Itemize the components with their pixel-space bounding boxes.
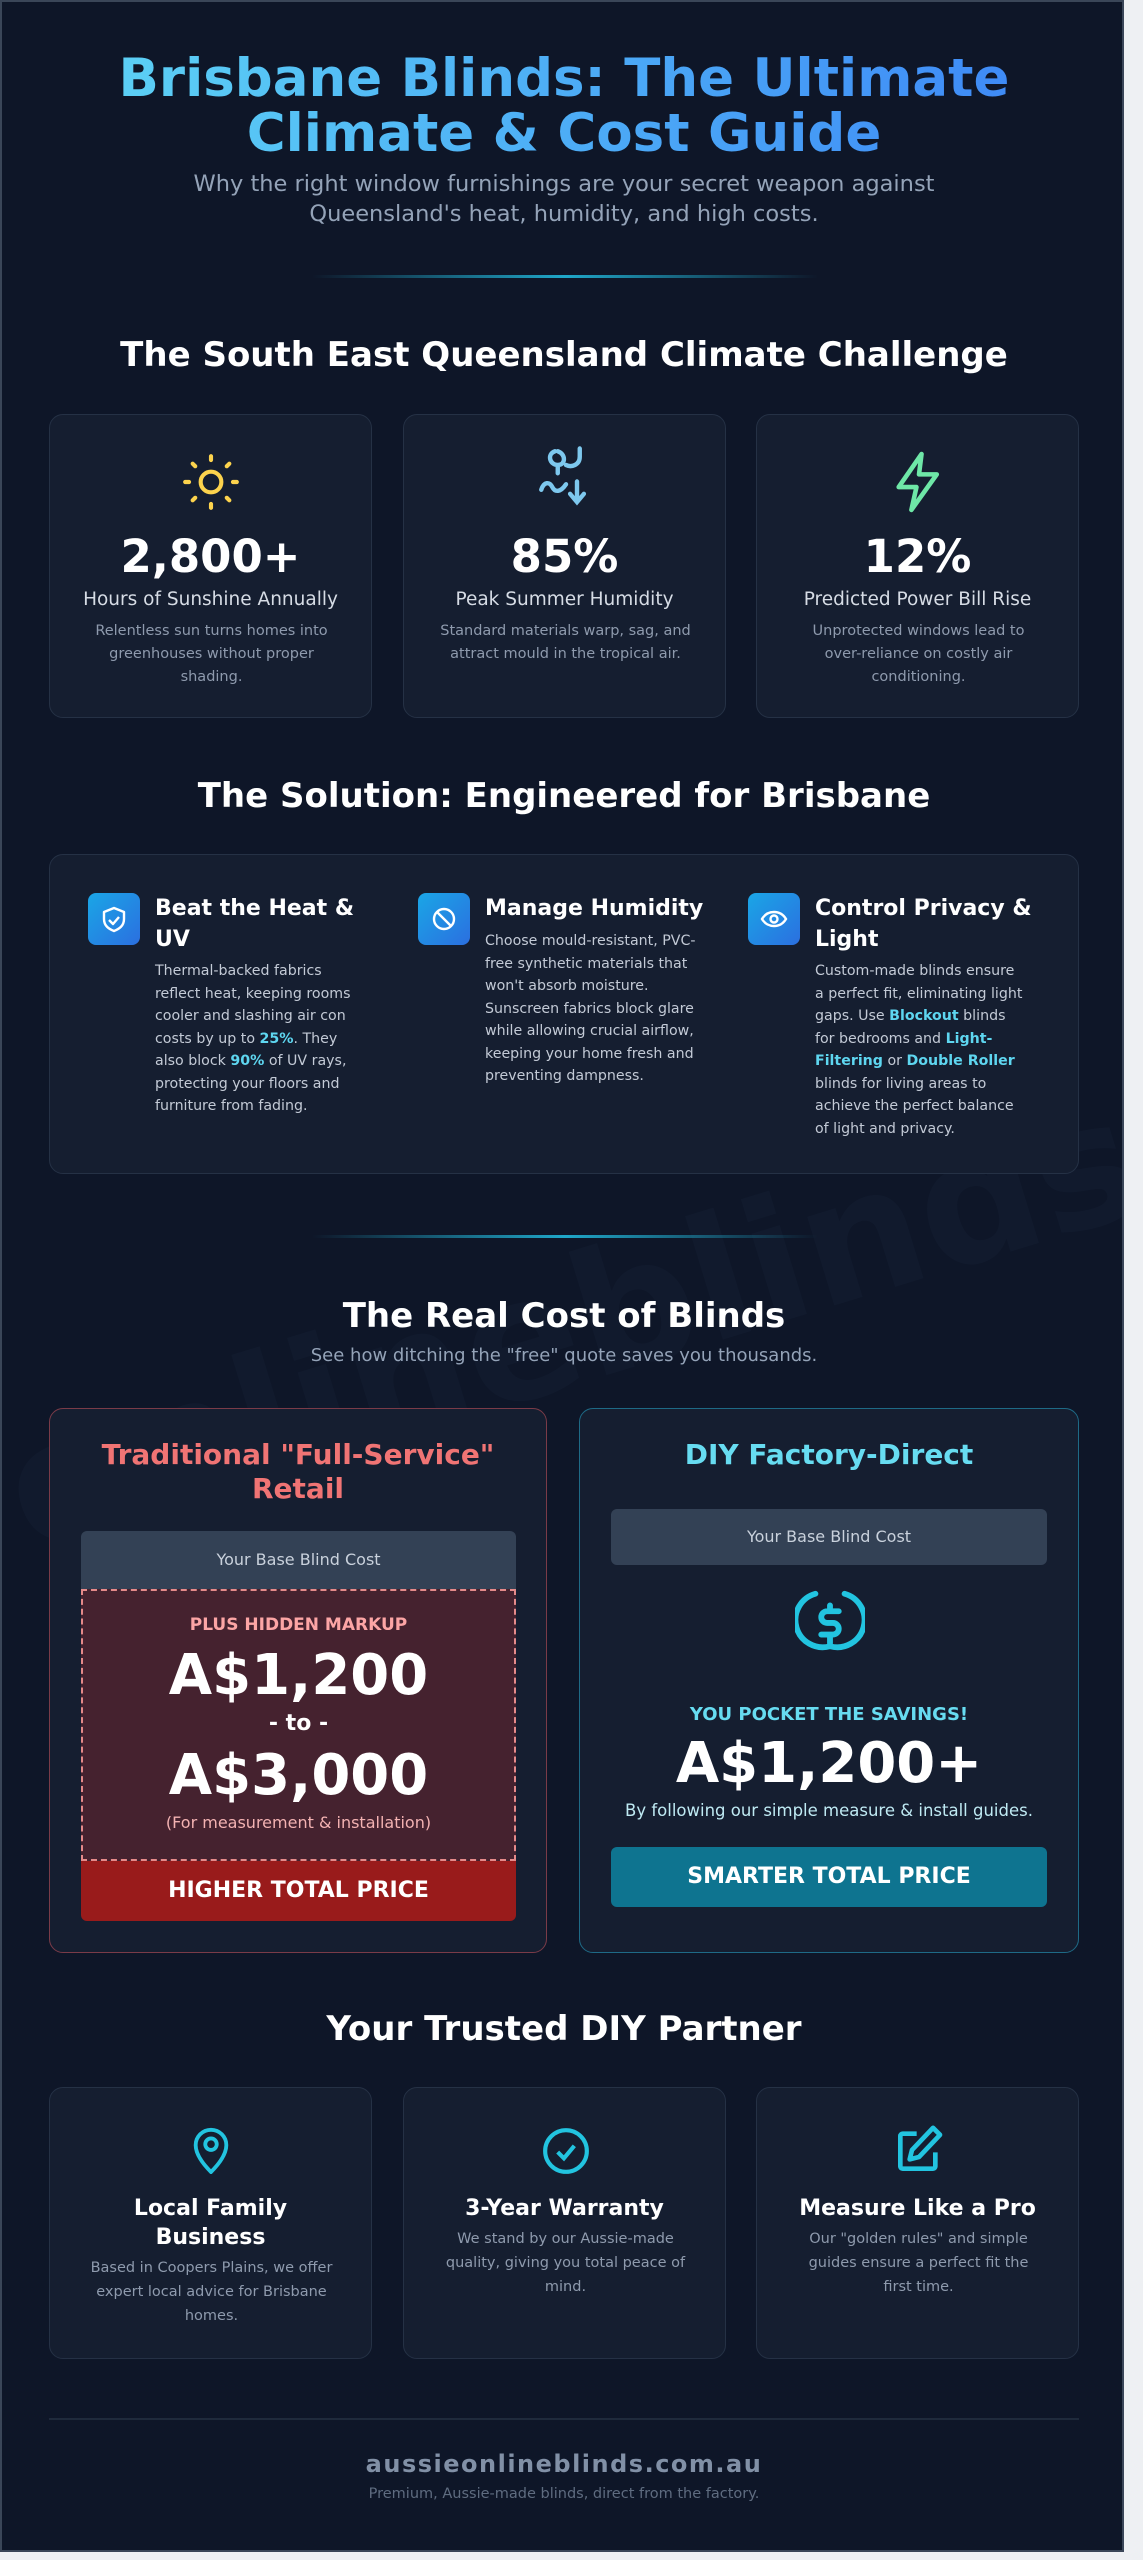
title: Brisbane Blinds: The Ultimate: [119, 48, 1009, 109]
heading: climate challenge: The South East Queensland Climate Challenge: [120, 335, 1008, 375]
panel: DIY factory direct: [579, 1408, 1079, 1953]
subtitle: Why the right window furnishings are your secret weapon against: [194, 171, 934, 197]
panel: power bill: 12%: [864, 530, 971, 583]
heading: real cost: The Real Cost of Blinds: [343, 1296, 785, 1336]
title: [2, 51, 1126, 161]
base cost block: [611, 1509, 1047, 1565]
panel: sunshine: 2,800+: [120, 530, 301, 583]
panel: humidity: Peak Summer Humidity: [455, 589, 674, 610]
base cost block: Your Base Blind Cost: [747, 1527, 911, 1546]
panel: solution: [49, 854, 1079, 1174]
panel: DIY factory direct: YOU POCKET THE SAVINGS!: [690, 1704, 968, 1725]
panel: DIY factory direct: DIY Factory-Direct: [685, 1438, 973, 1471]
panel: sunshine: [49, 414, 372, 718]
base cost block: Your Base Blind Cost: [216, 1550, 381, 1569]
panel: power bill: [756, 414, 1079, 718]
icon: eye: [748, 893, 800, 945]
icon: shield: [88, 893, 140, 945]
item: humidity: [418, 893, 703, 1084]
hidden markup block: [81, 1589, 516, 1861]
panel: local business: Business: [156, 2225, 265, 2250]
smarter total button: [611, 1847, 1047, 1907]
heading: trusted partner: Your Trusted DIY Partner: [326, 2009, 802, 2049]
base cost block: [81, 1531, 516, 1589]
panel: power bill: Predicted Power Bill Rise: [804, 589, 1031, 610]
panel: sunshine: Relentless sun turns homes into greenhouses without proper shading.: [95, 623, 328, 685]
panel: measure: Measure Like a Pro: [799, 2196, 1036, 2221]
panel: humidity: [403, 414, 726, 718]
higher total bar: HIGHER TOTAL PRICE: [168, 1878, 429, 1903]
panel: measure: Our "golden rules" and simple guides ensure a perfect fit the first time.: [809, 2231, 1028, 2295]
panel: humidity: 85%: [511, 530, 618, 583]
icon: lightning: [896, 452, 940, 512]
panel: warranty: 3-Year Warranty: [465, 2196, 664, 2221]
item: heat & UV: [88, 893, 354, 1114]
panel: measure: [756, 2087, 1079, 2359]
icon: pencil edit: [898, 2126, 942, 2171]
icon: sun: [183, 454, 239, 510]
heading: solution: The Solution: Engineered for Brisbane: [198, 776, 930, 816]
icon: savings: [795, 1590, 865, 1650]
panel: warranty: [403, 2087, 726, 2359]
footer domain: aussieonlineblinds.com.au: [366, 2450, 762, 2478]
item: privacy: [748, 893, 1032, 1136]
item: privacy: Control Privacy & Light: [815, 896, 1032, 952]
subtitle: [194, 171, 934, 227]
panel: humidity: Standard materials warp, sag, and attract mould in the tropical air.: [440, 623, 691, 662]
panel: power bill: Unprotected windows lead to over-reliance on costly air conditioning.: [813, 623, 1024, 685]
subtitle: Queensland's heat, humidity, and high costs.: [309, 201, 819, 227]
icon: check circle: [543, 2128, 589, 2174]
icon: humidity: [539, 446, 586, 506]
item: privacy: Custom-made blinds ensure a perfect fit, eliminating light gaps. Use Blockout blinds for bedrooms and Light-Filtering or Double Roller blinds for living areas to achieve the perfect balance of light and privacy.: [815, 963, 1022, 1136]
title: Climate & Cost Guide: [247, 103, 881, 164]
panel: warranty: We stand by our Aussie-made quality, giving you total peace of mind.: [446, 2231, 685, 2295]
hidden markup block: - to -: [269, 1711, 328, 1736]
hidden markup block: A$3,000: [169, 1743, 428, 1808]
hidden markup block: A$1,200: [169, 1643, 428, 1708]
item: heat & UV: Beat the Heat & UV: [155, 896, 354, 952]
hidden markup block: (For measurement & installation): [166, 1813, 431, 1832]
panel: DIY factory direct: By following our simple measure & install guides.: [625, 1801, 1033, 1820]
footer tagline: Premium, Aussie-made blinds, direct from the factory.: [369, 2486, 759, 2502]
panel: traditional retail: Traditional "Full-Service": [102, 1438, 494, 1471]
icon: no-sign: [418, 893, 470, 945]
panel: traditional retail: Retail: [252, 1472, 344, 1505]
hidden markup block: PLUS HIDDEN MARKUP: [190, 1615, 407, 1635]
item: humidity: Choose mould-resistant, PVC-free synthetic materials that won't absorb moisture. Sunscreen fabrics block glare while allowing crucial airflow, keeping your home fresh and preventing dampness.: [485, 933, 696, 1084]
panel: DIY factory direct: A$1,200+: [676, 1731, 982, 1796]
panel: local business: [49, 2087, 372, 2359]
panel: local business: Local Family: [134, 2196, 287, 2221]
panel: traditional retail: [49, 1408, 547, 1953]
smarter total button: SMARTER TOTAL PRICE: [687, 1864, 971, 1889]
subheading: See how ditching the "free" quote saves you thousands.: [311, 1345, 817, 1366]
higher total bar: [81, 1861, 516, 1921]
item: heat & UV: Thermal-backed fabrics reflect heat, keeping rooms cooler and slashing air con costs by up to 25%. They also block 90% of UV rays, protecting your floors and furniture from fading.: [155, 963, 350, 1114]
icon: map pin: [194, 2128, 228, 2174]
panel: sunshine: Hours of Sunshine Annually: [83, 589, 338, 610]
item: humidity: Manage Humidity: [485, 896, 703, 921]
panel: local business: Based in Coopers Plains, we offer expert local advice for Brisbane homes.: [91, 2260, 332, 2324]
